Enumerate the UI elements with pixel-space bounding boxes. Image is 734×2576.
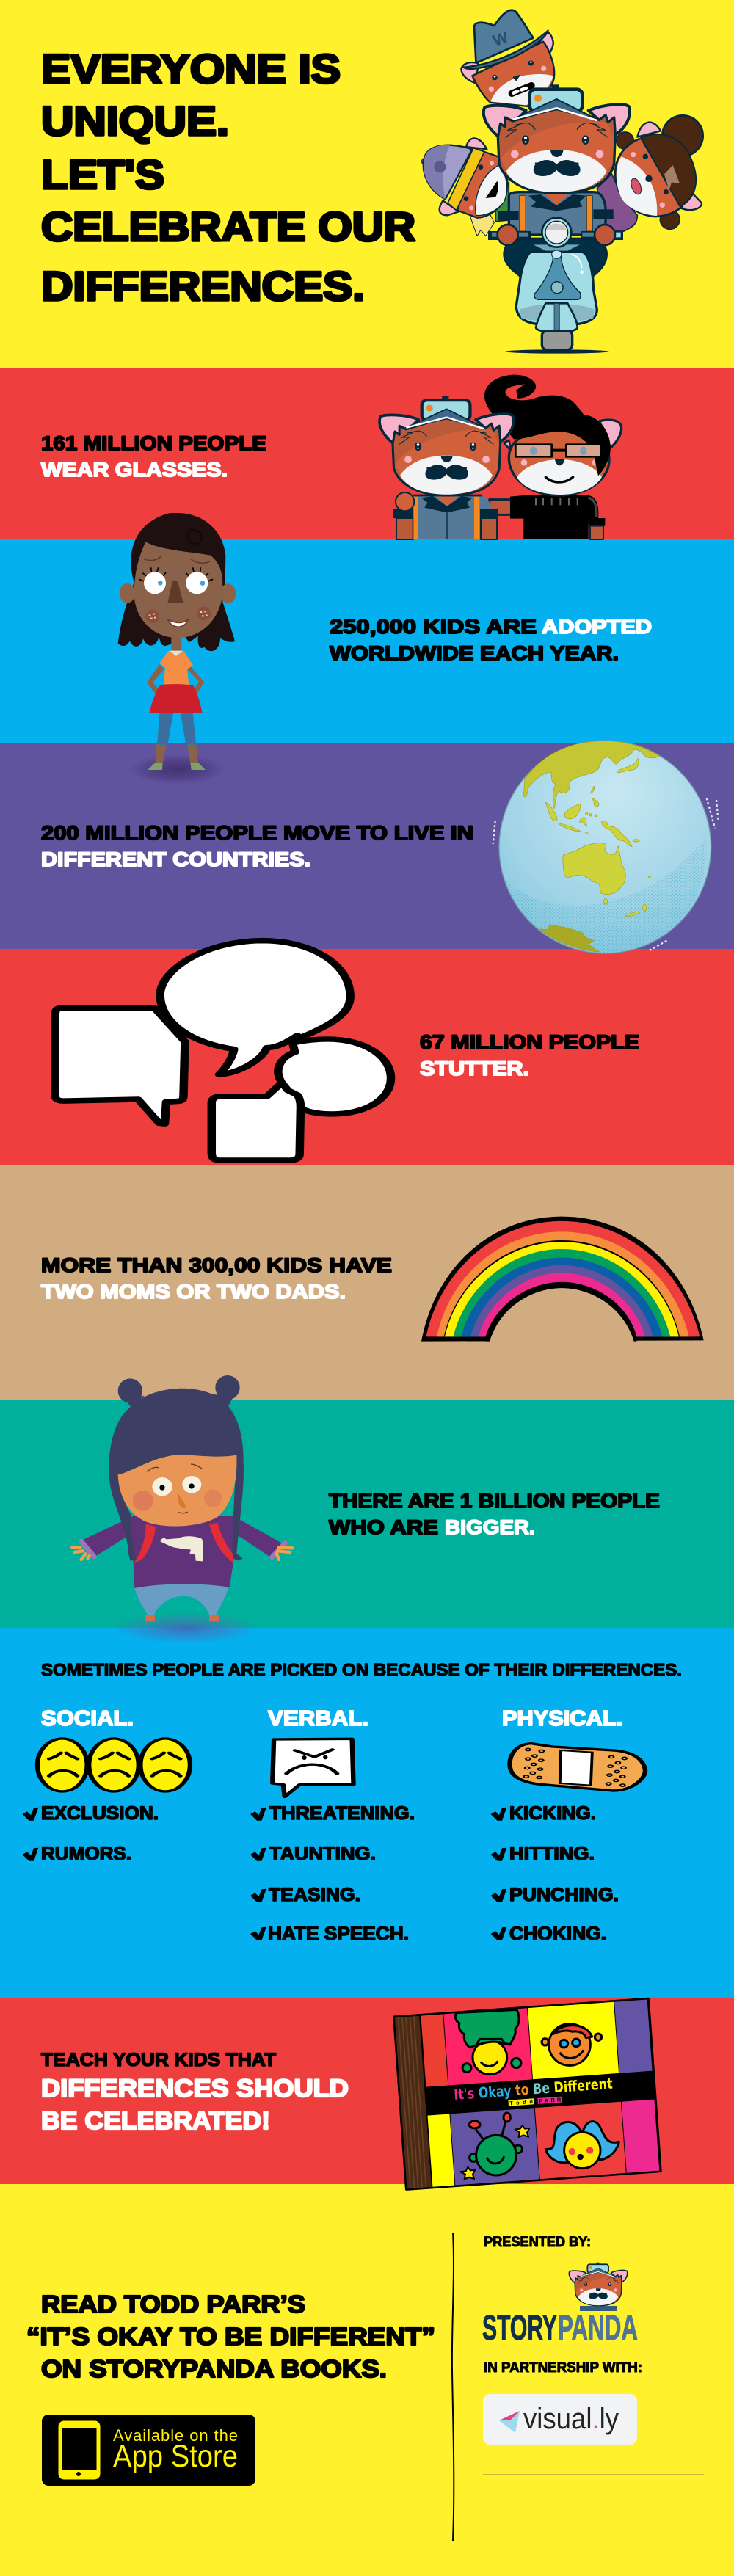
icon: phone [60,2423,98,2478]
text: bigger: WHO ARE [329,1516,438,1538]
motion marks [493,798,718,950]
heading: social: SOCIAL. [41,1707,134,1731]
text: teach your kids: BE CELEBRATED! [41,2107,270,2135]
text: countries [41,822,473,870]
fox head with moustache [379,396,514,495]
alien face [460,2113,529,2179]
logo: visual.ly: visual.ly [523,2403,619,2435]
rider body [498,192,614,235]
title: DIFFERENCES. [41,263,365,309]
text: bullying intro: SOMETIMES PEOPLE ARE PICKED ON BECAUSE OF THEIR DIFFERENCES. [41,1660,682,1679]
text: bigger: THERE ARE 1 BILLION PEOPLE [329,1490,660,1512]
girl shadow [128,754,226,785]
logo: visual.ly [483,2394,637,2445]
fox body with suspenders [393,492,498,539]
logo: storypanda fox [569,2263,628,2311]
icon: speech bubbles [55,941,391,1160]
girl hair [118,513,235,651]
land masses [523,741,659,952]
text: adopted: WORLDWIDE EACH YEAR. [330,642,619,664]
text: read Todd Parr: ON STORYPANDA BOOKS. [41,2355,387,2382]
title [41,46,415,309]
book panels [393,1998,662,2191]
icon: bandage [510,1744,645,1791]
divider [452,2233,454,2541]
kid hat [109,1375,244,1561]
large round bubble [160,941,350,1074]
bottom square bubble [211,1083,300,1160]
list: physical: CHOKING. [509,1924,606,1944]
list: verbal: TEASING. [269,1885,360,1905]
app store badge [42,2415,255,2486]
glasses face [542,2024,602,2065]
text: glasses: WEAR GLASSES. [41,459,228,481]
illustration: book cover [393,1998,662,2191]
girl body [120,583,236,770]
column: verbal [250,1707,415,1944]
heading: verbal: VERBAL. [268,1707,368,1731]
text: countries: DIFFERENT COUNTRIES. [41,848,310,870]
illustration: fox couple with glasses [379,375,622,539]
scooter [488,218,623,354]
list: social: EXCLUSION. [41,1803,159,1824]
text: adopted: 250,000 KIDS ARE [330,616,537,638]
list: physical [491,1803,619,1944]
text: glasses [41,432,266,481]
icon: angry speech bubble [272,1739,354,1797]
illustration: rainbow [421,1217,704,1343]
left fox with purple hat [422,138,507,236]
text: stutter: 67 MILLION PEOPLE [420,1031,639,1053]
text: teach your kids: TEACH YOUR KIDS THAT [41,2050,276,2070]
logo: storypanda wordmark: STORY [482,2309,557,2348]
text: two moms [41,1254,392,1303]
backpacks [495,174,637,231]
illustration: kid in hat [72,1375,292,1644]
list: physical: PUNCHING. [509,1885,619,1905]
list: social [23,1803,159,1864]
left square bubble [55,1008,185,1124]
fox with black hair and glasses [484,375,622,539]
icon: sad faces [37,1739,190,1791]
text: teach your kids: DIFFERENCES SHOULD [41,2075,349,2103]
girl face [134,530,222,638]
panel: adopted blue [0,539,734,743]
green-haired face [455,2009,521,2075]
book title: It's Okay to Be Different [453,2075,614,2103]
rule [483,2474,704,2475]
panel: move countries purple [0,743,734,949]
list: social: RUMORS. [41,1844,131,1864]
text: stutter [420,1031,639,1080]
text: bigger: BIGGER. [445,1516,535,1538]
panel: teach red [0,1998,734,2184]
text: stutter: STUTTER. [420,1058,529,1080]
kid face [118,1455,236,1527]
main fox head [484,84,630,193]
panel: hero yellow [0,0,734,368]
text: glasses: 161 MILLION PEOPLE [41,432,266,454]
list: verbal: HATE SPEECH. [268,1924,409,1944]
text: presented by: PRESENTED BY: [484,2235,591,2250]
text: adopted [330,616,652,664]
blue-haired face [545,2122,619,2169]
app store badge: App Store [113,2439,238,2474]
illustration: globe [493,741,718,953]
text: teach your kids [41,2050,349,2135]
panel: bigger green [0,1400,734,1628]
text: adopted: ADOPTED [542,616,652,638]
logo: storypanda wordmark: PANDA [558,2309,638,2348]
panel: two moms tan [0,1165,734,1400]
book title: Todd [509,2098,533,2106]
text: read Todd Parr: “IT’S OKAY TO BE DIFFERENT” [26,2323,435,2350]
right fox with bun [615,115,703,229]
list: verbal: THREATENING. [269,1803,415,1824]
text: bigger [329,1490,660,1538]
text: read Todd Parr: READ TODD PARR’S [41,2291,305,2318]
heading: physical: PHYSICAL. [502,1707,622,1731]
title: LET'S [41,151,164,197]
top fox with fedora [461,10,554,106]
panel: stutter red [0,949,734,1165]
kid body [72,1516,292,1621]
text: in partnership with: IN PARTNERSHIP WITH: [484,2360,642,2376]
panel: footer yellow [0,2184,734,2576]
column: physical [491,1707,645,1944]
title: EVERYONE IS [41,46,341,92]
title: CELEBRATE OUR [41,203,415,250]
list: physical: HITTING. [509,1844,595,1864]
list: verbal: TAUNTING. [269,1844,376,1864]
top fox with fedora: W [490,28,511,50]
illustration: girl [118,513,236,785]
app store badge: Available on the [113,2426,238,2445]
title: UNIQUE. [41,98,229,144]
list: verbal [250,1803,415,1944]
kid shadow [112,1612,259,1644]
panel: bullying blue [0,1628,734,1998]
small round bubble [278,1039,391,1114]
book title: PARR [539,2096,562,2104]
column: social [23,1707,190,1864]
text: two moms: TWO MOMS OR TWO DADS. [41,1281,346,1303]
text: two moms: MORE THAN 300,00 KIDS HAVE [41,1254,392,1276]
panel: glasses red [0,368,734,539]
text: countries: 200 MILLION PEOPLE MOVE TO LIVE IN [41,822,473,844]
list: physical: KICKING. [509,1803,596,1824]
illustration: foxes on scooter [422,10,703,354]
text: read Todd Parr [26,2291,435,2382]
sponsors [482,2235,704,2475]
